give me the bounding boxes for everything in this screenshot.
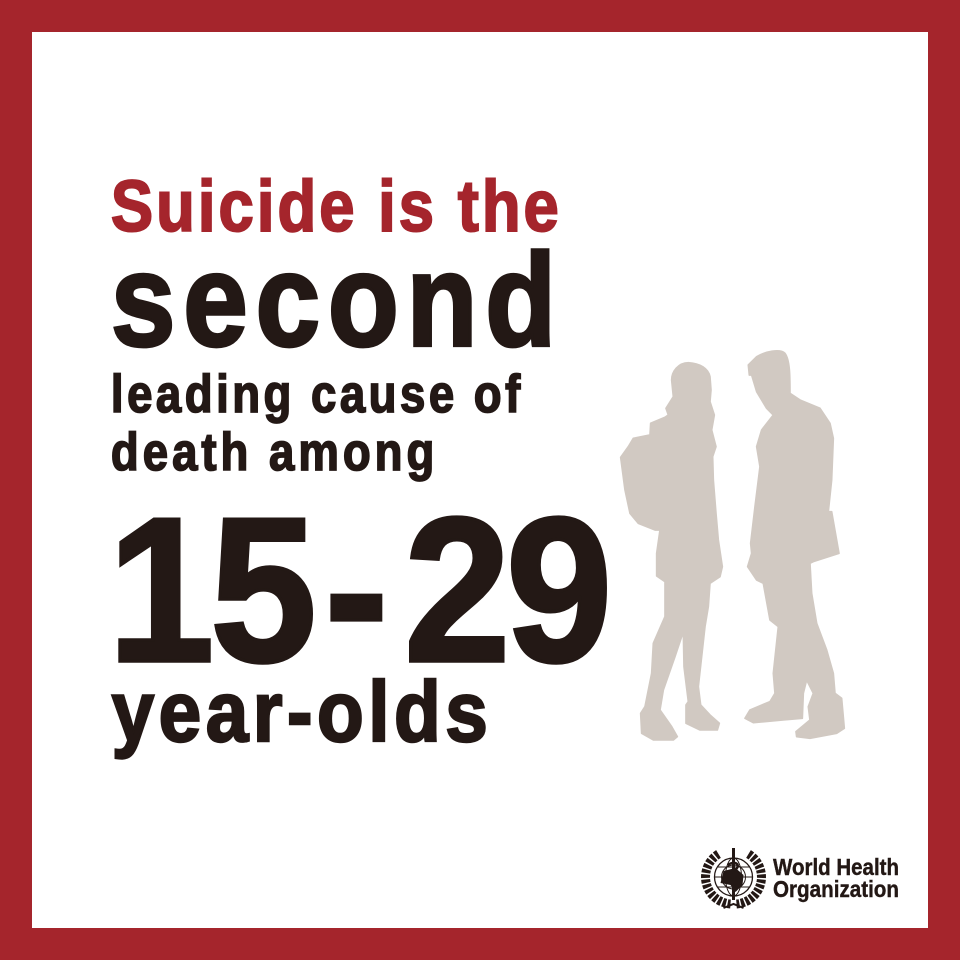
illustration: two young people silhouettes (621, 351, 844, 740)
silhouette: girl with backpack (621, 363, 722, 740)
text: year-olds: year-olds (112, 665, 488, 760)
silhouette: boy with folder (745, 351, 844, 738)
wreath (706, 854, 761, 904)
heading: Suicide is the: Suicide is the (111, 167, 559, 247)
text: World Health: World Health (773, 854, 899, 880)
text: death among: death among (111, 423, 434, 482)
icon: WHO emblem (706, 848, 761, 908)
text: leading cause of: leading cause of (111, 365, 521, 424)
logo: World Health Organization (706, 848, 899, 908)
heading: second: second (111, 227, 556, 374)
big number: 15-29: 15-29 (108, 476, 612, 706)
text: Organization: Organization (773, 876, 899, 902)
